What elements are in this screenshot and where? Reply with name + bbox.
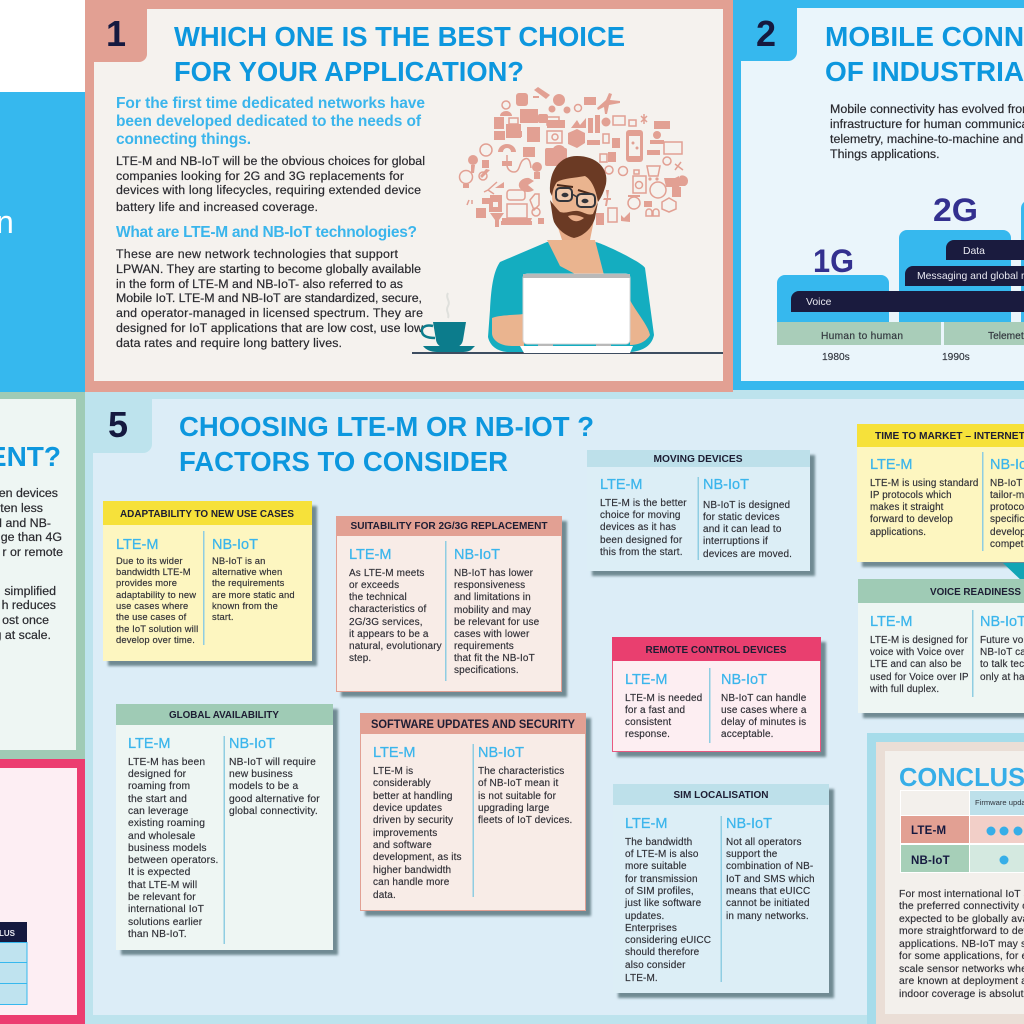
- card: time to market: IP protocols which: [870, 490, 952, 501]
- card: global availability: business models: [128, 843, 207, 854]
- body text 4: en devices: [0, 486, 58, 500]
- card: voice readiness: [858, 579, 1024, 718]
- technologies body text: Mobile IoT. LTE-M and NB-IoT are standardized, secure,: [116, 291, 422, 305]
- card: SIM localisation: updates.: [625, 911, 664, 922]
- number tab 1: 1: [106, 13, 126, 54]
- card: moving devices: devices are moved.: [703, 549, 792, 560]
- card: suitability for 2G/3G replacement: natural, evolutionary: [349, 641, 442, 652]
- card: global availability: models to be a: [229, 781, 299, 792]
- card: adaptability to new use cases: the IoT solution will: [116, 623, 198, 634]
- card: SIM localisation: [613, 784, 834, 998]
- chart: generations timeline: 2G: [933, 192, 978, 228]
- number tab 5: [85, 392, 152, 453]
- card: software updates and security: upgrading large: [478, 803, 550, 814]
- card: suitability for 2G/3G replacement: SUITABILITY FOR 2G/3G REPLACEMENT: [350, 521, 548, 532]
- card: global availability: NB-IoT will require: [229, 757, 316, 768]
- body text 2: Things applications.: [830, 147, 940, 161]
- card: global availability: GLOBAL AVAILABILITY: [169, 710, 279, 721]
- card: global availability: NB-IoT: [229, 736, 275, 752]
- card: adaptability to new use cases: [103, 501, 317, 666]
- card: time to market: LTE-M is using standard: [870, 478, 978, 489]
- card: SIM localisation: of SIM profiles,: [625, 886, 694, 897]
- card: suitability for 2G/3G replacement: step.: [349, 653, 371, 664]
- card: suitability for 2G/3G replacement: and limitations in: [454, 592, 531, 603]
- card: software updates and security: fleets of IoT devices.: [478, 815, 572, 826]
- card: moving devices: MOVING DEVICES: [654, 454, 743, 465]
- card: moving devices: NB-IoT is designed: [703, 500, 790, 511]
- card: remote control devices: LTE-M is needed: [625, 693, 702, 704]
- card: adaptability to new use cases: develop over time.: [116, 634, 195, 645]
- card: software updates and security: can handle more: [373, 877, 450, 888]
- card: suitability for 2G/3G replacement: be relevant for use: [454, 617, 540, 628]
- card: suitability for 2G/3G replacement: it appears to be a: [349, 629, 429, 640]
- heading 2: [825, 21, 1024, 87]
- card: adaptability to new use cases: use cases where: [116, 600, 188, 611]
- body text 4: ge than 4G: [1, 530, 62, 544]
- card: voice readiness: VOICE READINESS: [930, 587, 1021, 598]
- card: software updates and security: LTE-M: [373, 745, 415, 761]
- comparison table: NB-IoT: [911, 855, 950, 867]
- card: adaptability to new use cases: the requirements: [212, 577, 285, 588]
- card: suitability for 2G/3G replacement: NB-IoT: [454, 547, 500, 563]
- card: moving devices: been designed for: [600, 535, 683, 546]
- card: software updates and security: better at handling: [373, 791, 453, 802]
- card: SIM localisation: means that eUICC: [726, 886, 810, 897]
- heading 1: WHICH ONE IS THE BEST CHOICE: [174, 21, 625, 52]
- technologies body text: LPWAN. They are starting to become globally available: [116, 262, 421, 276]
- card: suitability for 2G/3G replacement: mobility and may: [454, 605, 531, 616]
- card: moving devices: interruptions if: [703, 536, 768, 547]
- heading 5: [179, 411, 594, 477]
- card: moving devices: devices as it has: [600, 522, 676, 533]
- card: global availability: global connectivity.: [229, 806, 318, 817]
- card: software updates and security: of NB-IoT mean it: [478, 778, 558, 789]
- card: software updates and security: device updates: [373, 803, 442, 814]
- body text 4: simplified: [4, 584, 56, 598]
- chart: generations timeline: 1990s: [942, 352, 970, 363]
- card: global availability: between operators.: [128, 855, 218, 866]
- card: global availability: roaming from: [128, 781, 190, 792]
- card: global availability: and wholesale: [128, 831, 196, 842]
- subheading: what are the technologies: What are LTE-M and NB-IoT technologies?: [116, 224, 417, 241]
- card: remote control devices: response.: [625, 729, 670, 740]
- body text 4: ten less: [0, 501, 43, 515]
- card: software updates and security: and software: [373, 840, 432, 851]
- card: voice readiness: LTE and can also be: [870, 659, 962, 670]
- card: remote control devices: NB-IoT can handle: [721, 693, 807, 704]
- card: software updates and security: considerably: [373, 778, 431, 789]
- card: SIM localisation: Enterprises: [625, 923, 677, 934]
- intro body text: devices with long lifecycles, requiring extended device: [116, 183, 421, 197]
- chart: generations timeline: Data: [963, 246, 985, 257]
- body text 4: ost once: [2, 613, 49, 627]
- card: remote control devices: consistent: [625, 717, 671, 728]
- technologies body text: and operator-managed in licensed spectrum. They are: [116, 306, 423, 320]
- card: remote control devices: acceptable.: [721, 729, 774, 740]
- chart: generations timeline: 1G: [813, 243, 854, 279]
- panel: left blue intro: [0, 92, 85, 390]
- intro body text: battery life and increased coverage.: [116, 200, 318, 214]
- card: SIM localisation: IoT and SMS which: [726, 874, 815, 885]
- card: suitability for 2G/3G replacement: or exceeds: [349, 580, 399, 591]
- intro body text: companies looking for 2G and 3G replacements for: [116, 169, 404, 183]
- card: moving devices: LTE-M is the better: [600, 498, 687, 509]
- card: remote control devices: NB-IoT: [721, 672, 767, 688]
- card: global availability: new business: [229, 769, 293, 780]
- card: global availability: than NB-IoT.: [128, 929, 187, 940]
- decorative connector triangle: [1003, 563, 1024, 583]
- card: moving devices: LTE-M: [600, 477, 642, 493]
- panel 1: which one is the best choice: [85, 0, 733, 390]
- panel: conclusion: [867, 733, 1024, 1024]
- intro subheading: been developed dedicated to the needs of: [116, 113, 422, 130]
- card: moving devices: for static devices: [703, 512, 780, 523]
- card: remote control devices: [612, 637, 826, 757]
- card: software updates and security: improvements: [373, 828, 437, 839]
- card: adaptability to new use cases: start.: [212, 611, 234, 622]
- card: adaptability to new use cases: adaptability to new: [116, 589, 196, 600]
- card: global availability: designed for: [128, 769, 187, 780]
- card: global availability: good alternative for: [229, 794, 320, 805]
- card: time to market: makes it straight: [870, 502, 944, 513]
- card: SIM localisation: more suitable: [625, 861, 687, 872]
- card: time to market: forward to develop: [870, 514, 953, 525]
- table fragment: [0, 922, 27, 1004]
- card: suitability for 2G/3G replacement: LTE-M: [349, 547, 391, 563]
- card: SIM localisation: just like software: [624, 898, 702, 909]
- card: SIM localisation: LTE-M: [625, 816, 667, 832]
- card: adaptability to new use cases: bandwidth LTE-M: [116, 566, 191, 577]
- technologies body text: in the form of LTE-M and NB-IoT- also referred to as: [116, 277, 403, 291]
- card: software updates and security: development, as its: [373, 852, 462, 863]
- card: software updates and security: SOFTWARE UPDATES AND SECURITY: [371, 719, 575, 731]
- card: adaptability to new use cases: ADAPTABILITY TO NEW USE CASES: [120, 509, 294, 520]
- comparison table: [900, 790, 1024, 873]
- heading 1: FOR YOUR APPLICATION?: [174, 56, 524, 87]
- panel 3: cropped pink panel with table: [0, 759, 85, 1024]
- card: suitability for 2G/3G replacement: [336, 516, 567, 697]
- illustration: man with laptop: [488, 156, 654, 353]
- body text 4: h reduces: [2, 598, 56, 612]
- card: suitability for 2G/3G replacement: 2G/3G services,: [349, 617, 423, 628]
- card: suitability for 2G/3G replacement: requirements: [454, 641, 514, 652]
- number tab 2: 2: [756, 13, 776, 54]
- card: global availability: LTE-M has been: [128, 757, 205, 768]
- card: software updates and security: [360, 713, 591, 916]
- card: remote control devices: delay of minutes is: [721, 717, 806, 728]
- card: SIM localisation: in many networks.: [726, 911, 809, 922]
- card: suitability for 2G/3G replacement: As LTE-M meets: [349, 568, 425, 579]
- card: adaptability to new use cases: are more static and: [212, 589, 295, 600]
- chart: generations timeline: Voice: [806, 297, 832, 308]
- card: suitability for 2G/3G replacement: NB-IoT has lower: [454, 568, 534, 579]
- number tab 5: 5: [108, 404, 128, 445]
- card: global availability: be relevant for: [128, 892, 196, 903]
- card: remote control devices: use cases where a: [721, 705, 807, 716]
- card: software updates and security: driven by security: [373, 815, 453, 826]
- card: software updates and security: The characteristics: [478, 766, 564, 777]
- card: software updates and security: NB-IoT: [478, 745, 524, 761]
- card: suitability for 2G/3G replacement: cases with lower: [454, 629, 530, 640]
- card: voice readiness: with full duplex.: [869, 684, 939, 695]
- card: SIM localisation: also consider: [625, 960, 686, 971]
- number tab 2: [733, 0, 797, 61]
- chart: generations timeline: [777, 192, 1024, 363]
- chart: generations timeline: Human to human: [821, 331, 903, 342]
- technologies body text: data rates and require long battery lives.: [116, 336, 342, 350]
- card: adaptability to new use cases: provides more: [116, 577, 177, 588]
- body text 4: r or remote: [2, 545, 63, 559]
- heading 5: CHOOSING LTE-M OR NB-IOT ?: [179, 411, 594, 442]
- card: time to market: [857, 424, 1024, 567]
- card: remote control devices: LTE-M: [625, 672, 667, 688]
- intro subheading: connecting things.: [116, 131, 251, 148]
- card: suitability for 2G/3G replacement: characteristics of: [349, 604, 426, 615]
- number tab 1: [85, 0, 147, 62]
- card: suitability for 2G/3G replacement: that fit the NB-IoT: [454, 653, 535, 664]
- card: SIM localisation: for transmission: [625, 874, 698, 885]
- card: remote control devices: REMOTE CONTROL DEVICES: [646, 645, 787, 656]
- card: SIM localisation: The bandwidth: [625, 837, 692, 848]
- intro body text: LTE-M and NB-IoT will be the obvious choices for global: [116, 154, 425, 168]
- illustration: icon cloud: [460, 87, 688, 227]
- card: voice readiness: voice with Voice over: [870, 647, 965, 658]
- card: global availability: It is expected: [128, 867, 191, 878]
- card: moving devices: [587, 450, 815, 576]
- technologies body text: These are new network technologies that support: [116, 247, 399, 261]
- card: adaptability to new use cases: alternative when: [212, 566, 282, 577]
- heading 5: FACTORS TO CONSIDER: [179, 446, 508, 477]
- card: global availability: can leverage: [128, 806, 189, 817]
- card: time to market: LTE-M: [870, 457, 912, 473]
- card: SIM localisation: LTE-M.: [625, 973, 658, 984]
- card: SIM localisation: combination of NB-: [726, 861, 813, 872]
- card: time to market: specific: [990, 514, 1024, 525]
- card: moving devices: NB-IoT: [703, 477, 749, 493]
- card: SIM localisation: of LTE-M is also: [625, 849, 699, 860]
- card: SIM localisation: support the: [726, 849, 778, 860]
- card: global availability: the start and: [128, 794, 187, 805]
- illustration: coffee cup: [422, 293, 475, 352]
- body text 2: telemetry, machine-to-machine and: [830, 132, 1023, 146]
- card: SIM localisation: Not all operators: [726, 837, 802, 848]
- card: adaptability to new use cases: the use cases of: [116, 611, 187, 622]
- card: SIM localisation: cannot be initiated: [726, 898, 810, 909]
- card: voice readiness: used for Voice over IP: [870, 672, 969, 683]
- card: global availability: that LTE-M will: [128, 880, 197, 891]
- card: remote control devices: for a fast and: [625, 705, 685, 716]
- card: adaptability to new use cases: NB-IoT is an: [212, 555, 266, 566]
- card: global availability: existing roaming: [128, 818, 205, 829]
- comparison table: LTE-M: [911, 825, 946, 837]
- card: moving devices: this from the start.: [600, 547, 683, 558]
- card: global availability: solutions earlier: [128, 917, 203, 928]
- card: moving devices: and it can lead to: [703, 524, 782, 535]
- card: software updates and security: LTE-M is: [373, 766, 413, 777]
- card: suitability for 2G/3G replacement: the technical: [349, 592, 407, 603]
- card: global availability: international IoT: [128, 904, 205, 915]
- card: adaptability to new use cases: NB-IoT: [212, 537, 258, 553]
- card: voice readiness: LTE-M is designed for: [870, 635, 968, 646]
- card: time to market: applications.: [870, 527, 926, 538]
- card: adaptability to new use cases: Due to its wider: [116, 555, 183, 566]
- card: suitability for 2G/3G replacement: specifications.: [454, 665, 519, 676]
- panel 5: choosing LTE-M or NB-IoT: [85, 390, 1024, 1024]
- card: SIM localisation: should therefore: [625, 947, 700, 958]
- card: global availability: [116, 704, 338, 955]
- technologies body text: designed for IoT applications that are low cost, use low: [116, 321, 423, 335]
- card: SIM localisation: NB-IoT: [726, 816, 772, 832]
- chart: generations timeline: 1980s: [822, 352, 850, 363]
- card: adaptability to new use cases: LTE-M: [116, 537, 158, 553]
- card: software updates and security: data.: [373, 890, 396, 901]
- intro subheading: For the first time dedicated networks have: [116, 95, 425, 112]
- card: suitability for 2G/3G replacement: responsiveness: [454, 580, 525, 591]
- card: global availability: LTE-M: [128, 736, 170, 752]
- card: moving devices: choice for moving: [600, 510, 681, 521]
- card: software updates and security: is not suitable for: [478, 791, 557, 802]
- card: SIM localisation: SIM LOCALISATION: [674, 790, 768, 801]
- card: adaptability to new use cases: known from the: [212, 600, 278, 611]
- panel 2: mobile connectivity: [733, 0, 1024, 390]
- panel 4: deployment (cropped): [0, 390, 85, 759]
- card: SIM localisation: considering eUICC: [625, 935, 711, 946]
- heading 1: [174, 21, 625, 87]
- card: software updates and security: higher bandwidth: [373, 865, 451, 876]
- card: voice readiness: LTE-M: [870, 614, 912, 630]
- illustration: desk line: [412, 352, 723, 354]
